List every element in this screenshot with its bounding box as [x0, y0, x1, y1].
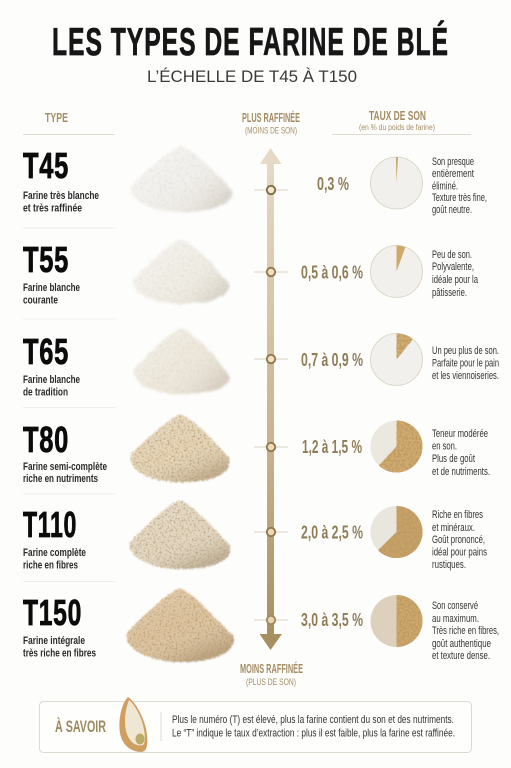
- bran value: T55: 0,5 à 0,6 %: [301, 262, 363, 282]
- description: T55: Peu de son.: [432, 249, 472, 261]
- axis marker: T45: [254, 186, 288, 194]
- bran value: T80: 1,2 à 1,5 %: [302, 437, 362, 457]
- description: T110: idéal pour pains: [432, 546, 487, 558]
- column header: taux de son: TAUX DE SON: [369, 108, 426, 123]
- type label: T110: Farine complète: [23, 547, 86, 559]
- type label: T65: Farine blanche: [23, 374, 80, 386]
- type label: T55: [23, 239, 80, 306]
- description: T110: et minéraux.: [432, 522, 475, 534]
- flour pile: T55: [133, 239, 229, 304]
- axis label: moins raffinée: MOINS RAFFINÉE: [240, 661, 303, 676]
- bran value: T65: 0,7 à 0,9 %: [301, 350, 363, 370]
- description: T45: Texture très fine,: [432, 192, 487, 204]
- column header: type: TYPE: [45, 110, 68, 125]
- type label: T45: et très raffinée: [23, 202, 82, 214]
- description: T150: au maximum.: [432, 613, 479, 625]
- description: T80: [432, 428, 490, 478]
- type label: T150: [23, 592, 96, 660]
- type label: T45: Farine très blanche: [23, 190, 99, 202]
- pie chart: T80: [370, 420, 423, 472]
- refinement axis arrow: [254, 148, 288, 650]
- column header: type: [23, 110, 115, 134]
- flour pile: T110: [130, 500, 230, 569]
- column header: taux de son: [332, 108, 471, 134]
- flour pile: T150: [127, 588, 234, 662]
- description: T150: et texture dense.: [432, 650, 490, 662]
- description: T80: Teneur modérée: [432, 428, 488, 440]
- description: T150: [432, 600, 499, 662]
- description: T55: idéale pour la: [432, 274, 478, 286]
- type label: T55: courante: [23, 294, 58, 306]
- type label: T150: Farine intégrale: [23, 635, 85, 647]
- type label: T150: T150: [23, 592, 82, 633]
- type label: T150: très riche en fibres: [23, 648, 96, 660]
- description: T110: Goût prononcé,: [432, 534, 485, 546]
- type label: T110: [23, 504, 86, 572]
- description: T80: en son.: [432, 440, 457, 452]
- flour pile: T80: [131, 414, 229, 482]
- description: T45: Son presque: [432, 156, 474, 168]
- axis label: moins raffinée: (PLUS DE SON): [246, 677, 296, 688]
- callout text: [172, 714, 455, 740]
- description: T110: Riche en fibres: [432, 509, 483, 521]
- type label: T80: riche en nutriments: [23, 473, 98, 485]
- axis marker: T110: [254, 528, 288, 536]
- description: T150: Son conservé: [432, 600, 478, 612]
- description: T80: Plus de goût: [432, 453, 475, 465]
- axis marker: T80: [254, 443, 288, 451]
- type label: T80: T80: [23, 419, 69, 460]
- pie chart: T110: [370, 506, 423, 558]
- type label: T65: [23, 331, 80, 398]
- description: T45: éliminé.: [432, 180, 458, 192]
- axis marker: T150: [254, 616, 288, 624]
- subtitle: L’ÉCHELLE DE T45 À T150: [147, 67, 357, 86]
- axis marker: T65: [254, 355, 288, 363]
- type label: T55: Farine blanche: [23, 282, 80, 294]
- pie chart: T55: [370, 246, 422, 298]
- bran value: T45: 0,3 %: [317, 174, 349, 194]
- axis marker: T55: [254, 268, 288, 276]
- column header: plus raffinée: PLUS RAFFINÉE: [242, 110, 300, 125]
- bran value: T150: 3,0 à 3,5 %: [301, 610, 363, 630]
- description: T65: [432, 345, 499, 382]
- description: T55: pâtisserie.: [432, 287, 467, 299]
- description: T110: rustiques.: [432, 559, 466, 571]
- description: T45: goût neutre.: [432, 204, 472, 216]
- flour pile: T65: [134, 328, 229, 394]
- description: T45: [432, 156, 487, 216]
- column header: taux de son: (en % du poids de farine): [359, 123, 435, 132]
- callout heading: À SAVOIR: [55, 717, 106, 736]
- type label: T45: T45: [23, 145, 69, 186]
- pie chart: T45 0.3%: [370, 157, 422, 209]
- description: T55: [432, 249, 478, 299]
- description: T55: Polyvalente,: [432, 261, 474, 273]
- callout: à savoir: [40, 697, 472, 752]
- column header: plus raffinée: [242, 110, 300, 136]
- pie chart: T150: [370, 595, 422, 647]
- type label: T65: de tradition: [23, 386, 68, 398]
- type label: T80: [23, 419, 107, 485]
- icon: wheat grain: [119, 697, 147, 752]
- type label: T45: [23, 145, 99, 214]
- description: T80: et de nutriments.: [432, 466, 490, 478]
- bran value: T110: 2,0 à 2,5 %: [301, 522, 363, 542]
- pie chart: T65: [370, 333, 422, 386]
- axis label: moins raffinée: [240, 661, 303, 688]
- flour pile: T45: [131, 146, 232, 212]
- column header: plus raffinée: (MOINS DE SON): [245, 126, 297, 136]
- description: T150: goût authentique: [432, 638, 491, 650]
- type label: T65: T65: [23, 331, 69, 372]
- description: T45: entièrement: [432, 168, 474, 180]
- type label: T110: riche en fibres: [23, 560, 78, 572]
- description: T110: [432, 509, 487, 571]
- row dividers: [23, 228, 116, 582]
- type label: T80: Farine semi-complète: [23, 461, 107, 473]
- type label: T55: T55: [23, 239, 69, 280]
- type label: T110: T110: [23, 504, 77, 545]
